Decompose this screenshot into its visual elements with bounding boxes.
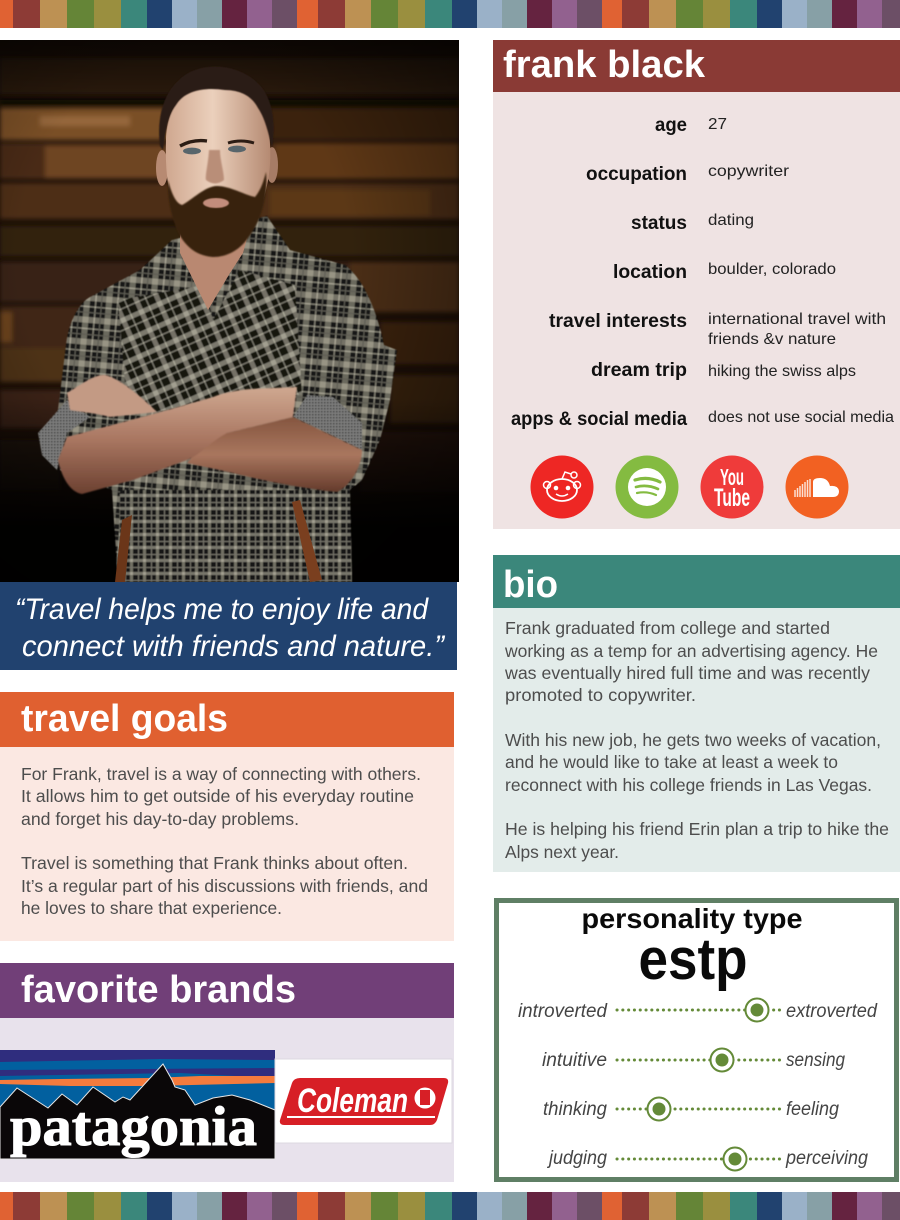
scale: introverted to extroverted: extroverted xyxy=(786,1001,878,1022)
scale: thinking to feeling: thinking xyxy=(543,1099,607,1120)
text: bio body: Frank graduated from college and started xyxy=(505,618,830,638)
top colour strip xyxy=(0,0,900,28)
field labels: status xyxy=(631,213,687,234)
text: travel goals body: It allows him to get outside of his everyday routine xyxy=(21,786,414,806)
scale: judging to perceiving: judging xyxy=(546,1148,607,1169)
field values xyxy=(708,116,894,426)
heading: frank black: frank black xyxy=(503,44,706,86)
text: bio body: was eventually hired full time and was recently xyxy=(504,663,870,683)
text: bio body xyxy=(504,618,889,862)
heading: favorite brands: favorite brands xyxy=(21,969,296,1011)
icon: spotify xyxy=(616,456,678,518)
head xyxy=(156,66,278,257)
scale: judging to perceiving: perceiving xyxy=(785,1148,868,1169)
icon: reddit xyxy=(530,456,594,518)
panel: favorite brands xyxy=(0,963,454,1182)
field values: 27 xyxy=(708,116,727,133)
icon: youtube: You xyxy=(720,464,744,490)
scale: thinking to feeling xyxy=(543,1098,839,1120)
panel: travel goals xyxy=(0,692,454,941)
field values: dating xyxy=(708,212,754,229)
field values: boulder, colorado xyxy=(708,261,836,278)
pocket trim xyxy=(115,500,322,582)
bottom colour strip xyxy=(0,1192,900,1220)
field labels: occupation xyxy=(586,164,687,185)
icon: soundcloud xyxy=(786,456,848,518)
scale: thinking to feeling: feeling xyxy=(786,1099,839,1120)
logo: coleman xyxy=(275,1059,452,1143)
rolled cuffs xyxy=(38,395,362,470)
field values: hiking the swiss alps xyxy=(708,363,856,380)
text: travel goals body: and forget his day-to-day problems. xyxy=(21,809,299,829)
field labels xyxy=(511,115,687,430)
quote banner xyxy=(0,582,457,670)
crossed arms xyxy=(58,375,362,494)
scale: intuitive to sensing: intuitive xyxy=(542,1050,607,1071)
portrait photo illustration xyxy=(0,40,459,582)
scale: introverted to extroverted: introverted xyxy=(518,1001,608,1022)
scale: introverted to extroverted xyxy=(518,998,878,1022)
panel: profile xyxy=(493,40,900,529)
text: bio body: He is helping his friend Erin plan a trip to hike the xyxy=(505,819,889,839)
field labels: apps & social media xyxy=(511,409,687,430)
field values: international travel with xyxy=(708,311,886,328)
neck and open collar xyxy=(180,234,247,310)
field labels: dream trip xyxy=(591,360,687,381)
panel: personality type xyxy=(496,900,896,1180)
field labels: age xyxy=(655,115,687,136)
shirt xyxy=(58,216,397,582)
text: bio body: working as a temp for an advertising agency. He xyxy=(504,641,878,661)
quote banner: “Travel helps me to enjoy life and xyxy=(15,593,429,626)
panel: bio xyxy=(493,555,900,872)
logo: patagonia: patagonia xyxy=(10,1096,257,1158)
text: travel goals body: It’s a regular part of his discussions with friends, and xyxy=(21,876,428,896)
heading: personality type: personality type xyxy=(582,903,802,934)
icon: youtube: Tube xyxy=(714,484,750,512)
quote banner: connect with friends and nature.” xyxy=(22,630,446,663)
text: bio body: and he would like to take at least a week to xyxy=(505,752,838,772)
icon: youtube xyxy=(700,456,764,518)
text: travel goals body: For Frank, travel is a way of connecting with others. xyxy=(21,764,421,784)
field values: copywriter xyxy=(708,163,790,180)
heading: bio: bio xyxy=(503,564,558,606)
text: travel goals body xyxy=(21,764,428,918)
logo: patagonia xyxy=(0,1050,275,1159)
text: bio body: promoted to copywriter. xyxy=(505,685,696,705)
scale: judging to perceiving xyxy=(546,1148,868,1170)
field labels: travel interests xyxy=(549,311,687,332)
type: estp: estp xyxy=(638,927,748,992)
field values: friends &v nature xyxy=(708,331,836,348)
text: travel goals body: Travel is something that Frank thinks about often. xyxy=(21,853,408,873)
field labels: location xyxy=(613,262,687,283)
field values: does not use social media xyxy=(708,409,894,426)
text: bio body: Alps next year. xyxy=(505,842,619,862)
heading: travel goals: travel goals xyxy=(21,698,228,740)
text: bio body: With his new job, he gets two weeks of vacation, xyxy=(505,730,881,750)
logo: coleman: Coleman xyxy=(297,1082,408,1120)
text: travel goals body: he loves to share that experience. xyxy=(21,898,282,918)
scale: intuitive to sensing: sensing xyxy=(786,1050,845,1071)
scale: intuitive to sensing xyxy=(542,1048,845,1072)
text: bio body: reconnect with his college friends in Las Vegas. xyxy=(505,775,872,795)
